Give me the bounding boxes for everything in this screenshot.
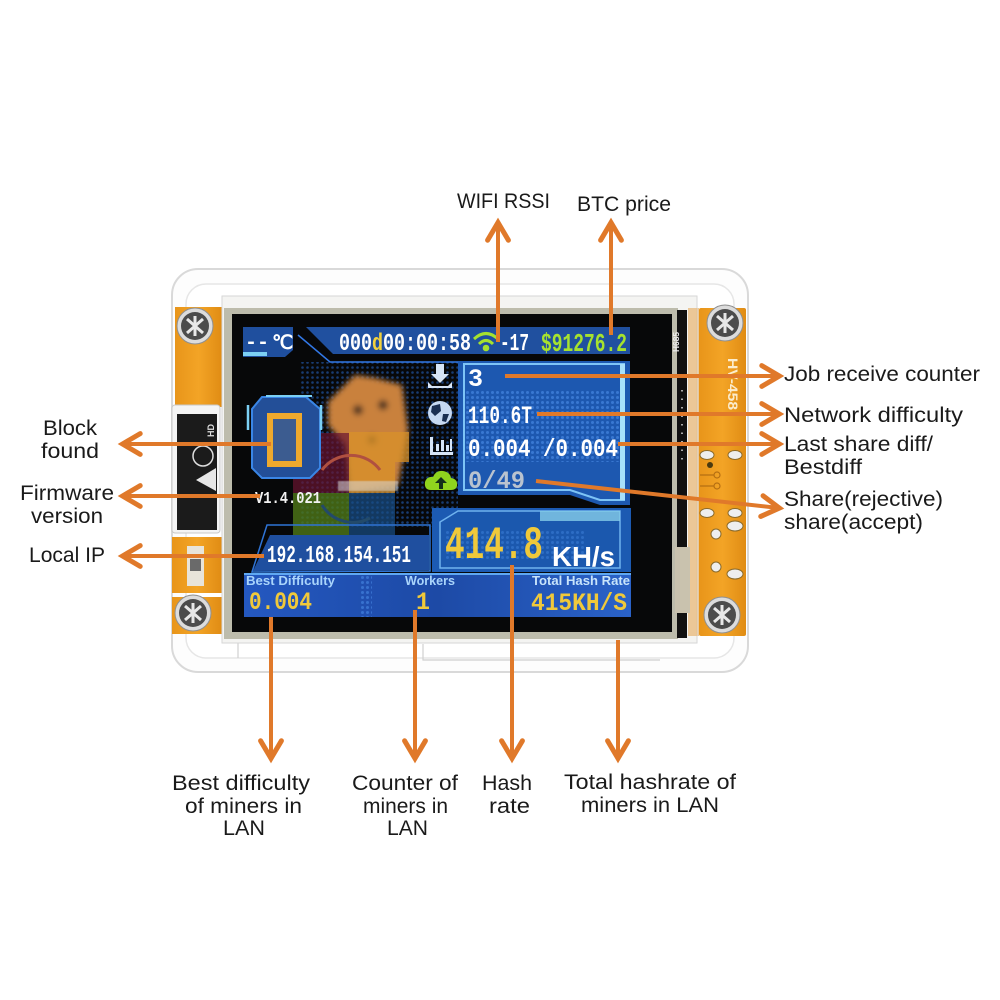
display module: H685 — [672, 331, 681, 352]
label: hash rate: rate — [489, 794, 530, 818]
bottom statistics bar — [244, 573, 631, 618]
watermark logo squares — [293, 432, 409, 545]
screws — [175, 305, 743, 633]
workers label: Workers — [405, 573, 455, 588]
temperature box: -- — [245, 332, 269, 355]
wifi rssi value: -17 — [500, 331, 529, 358]
top status bar — [298, 327, 630, 362]
label: last share diff: Last share diff/ — [784, 432, 933, 456]
temperature box: ℃ — [272, 333, 293, 354]
icon: bar chart — [430, 437, 453, 455]
dark central dot texture — [300, 362, 458, 527]
total hash rate value: 415KH/S — [531, 589, 627, 618]
label: block found: found — [41, 439, 99, 463]
job count value: 3 — [468, 365, 483, 394]
label: block found — [41, 416, 99, 463]
icon: upload cloud — [425, 471, 457, 490]
label: total hashrate: miners in LAN — [581, 793, 719, 817]
label: best difficulty: of miners in — [185, 794, 302, 818]
temperature box — [243, 327, 293, 357]
label: share counts — [784, 487, 943, 534]
arrow: network difficulty — [537, 412, 779, 416]
hash rate value: 414.8 — [445, 520, 543, 572]
label: firmware version: Firmware — [20, 481, 114, 505]
label: last share diff — [784, 432, 933, 479]
arrow: miners counter — [413, 610, 417, 758]
arrow: local ip — [123, 554, 264, 558]
best difficulty value: 0.004 — [249, 588, 312, 617]
hash rate unit: KH/s — [552, 541, 615, 572]
label: total hashrate — [564, 770, 736, 817]
label: best difficulty: LAN — [223, 816, 265, 840]
icon: download — [428, 364, 452, 388]
arrow: block found — [123, 442, 271, 446]
label: job receive counter: Job receive counter — [784, 362, 980, 386]
total hash rate label: Total Hash Rate — [532, 573, 630, 588]
screen user interface — [243, 327, 631, 618]
data panel — [458, 361, 630, 505]
share difficulty values: 0.004 /0.004 — [468, 435, 618, 464]
block found counter — [248, 396, 321, 478]
mascot image (blurred) — [328, 375, 408, 492]
arrow: firmware version — [123, 494, 260, 498]
local ip panel: 192.168.154.151 — [267, 543, 411, 570]
icon: globe — [428, 401, 452, 425]
label: last share diff: Bestdiff — [784, 455, 862, 479]
arrow: last share diff — [618, 442, 779, 446]
label: best difficulty — [172, 771, 310, 840]
left orange circuit board: HD — [206, 424, 216, 437]
label: counter of miners: miners in — [363, 794, 448, 818]
arrow: btc price — [609, 223, 613, 335]
wifi icon — [474, 334, 498, 350]
btc price value: $91276.2 — [541, 329, 627, 359]
label: block found: Block — [43, 416, 97, 440]
label: share counts: share(accept) — [784, 510, 923, 534]
network difficulty value: 110.6T — [468, 402, 532, 431]
acrylic case — [172, 269, 748, 672]
label: btc price: BTC price — [577, 192, 671, 216]
label: network difficulty: Network difficulty — [784, 403, 963, 427]
right orange circuit board — [688, 308, 746, 636]
arrow: best difficulty — [269, 617, 273, 758]
label: share counts: Share(rejective) — [784, 487, 943, 511]
label: counter of miners: LAN — [387, 816, 428, 840]
hash rate panel — [432, 508, 631, 572]
arrow: job receive counter — [505, 374, 779, 378]
arrow: total hashrate — [616, 640, 620, 758]
label: counter of miners — [352, 771, 458, 840]
label: total hashrate: Total hashrate of — [564, 770, 736, 794]
label: firmware version: version — [31, 504, 103, 528]
label: counter of miners: Counter of — [352, 771, 458, 795]
display module — [222, 296, 697, 643]
best difficulty label: Best Difficulty — [246, 573, 336, 588]
local ip panel — [252, 525, 430, 572]
label: hash rate — [482, 771, 532, 818]
label: wifi rssi: WIFI RSSI — [457, 189, 550, 213]
share counts value: 0/49 — [468, 467, 525, 496]
uptime text: 000d00:00:58 — [339, 331, 471, 358]
label: best difficulty: Best difficulty — [172, 771, 310, 795]
label: hash rate: Hash — [482, 771, 532, 795]
arrow: wifi rssi — [496, 223, 500, 342]
arrow: hash rate — [510, 565, 514, 758]
right orange circuit board: HV-458 — [725, 358, 741, 410]
left orange circuit board — [172, 307, 222, 634]
arrows — [123, 223, 779, 758]
label: local ip: Local IP — [29, 543, 105, 567]
side icons — [425, 364, 457, 490]
firmware version value: V1.4.021 — [255, 490, 321, 509]
label: firmware version — [20, 481, 114, 528]
arrow: share counts — [536, 481, 779, 508]
workers value: 1 — [416, 588, 430, 617]
